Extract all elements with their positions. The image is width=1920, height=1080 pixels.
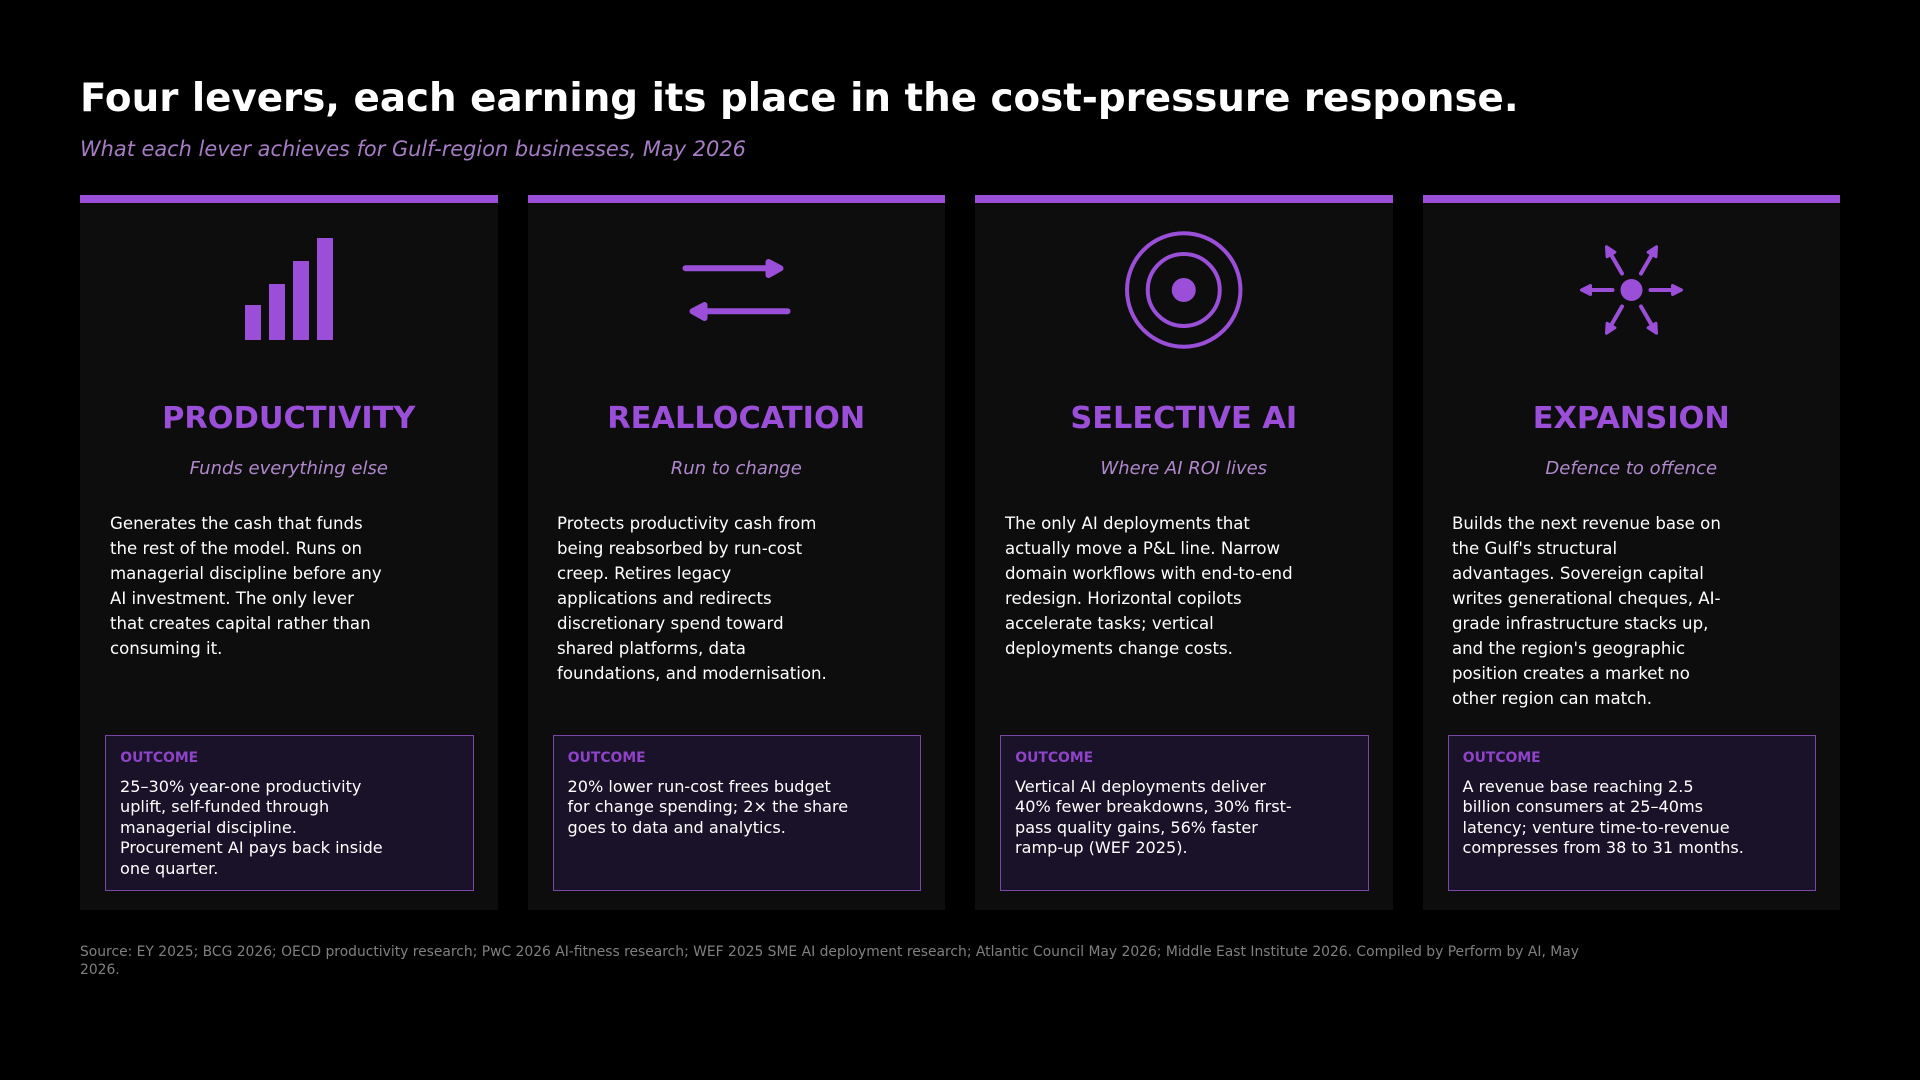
body text: that creates capital rather than xyxy=(110,614,371,632)
outcome box xyxy=(105,735,474,891)
body text: Builds the next revenue base on xyxy=(1452,514,1721,532)
body text xyxy=(110,514,382,658)
outcome box xyxy=(1000,735,1368,891)
heading: reallocation: REALLOCATION xyxy=(607,400,865,436)
title: Four levers, each earning its place in the cost-pressure response. xyxy=(80,76,1519,121)
body text: actually move a P&L line. Narrow xyxy=(1005,538,1280,558)
body text: The only AI deployments that xyxy=(1005,514,1250,532)
outcome box: OUTCOME xyxy=(1015,750,1093,766)
outcome box: A revenue base reaching 2.5 xyxy=(1462,777,1694,796)
outcome box: 20% lower run-cost frees budget xyxy=(568,777,831,796)
body text: creep. Retires legacy xyxy=(557,564,731,582)
outcome box: one quarter. xyxy=(120,859,218,878)
outcome box: billion consumers at 25–40ms xyxy=(1462,797,1703,816)
outcome box xyxy=(1448,735,1816,891)
outcome box: for change spending; 2× the share xyxy=(568,797,848,816)
outcome box: OUTCOME xyxy=(120,750,198,766)
body text: foundations, and modernisation. xyxy=(557,664,827,682)
body text: domain workflows with end-to-end xyxy=(1005,564,1293,582)
outcome box: 40% fewer breakdowns, 30% first- xyxy=(1015,797,1292,816)
body text: managerial discipline before any xyxy=(110,564,382,582)
body text: redesign. Horizontal copilots xyxy=(1005,588,1242,608)
panel: expansion xyxy=(1422,195,1840,910)
panel: selective AI xyxy=(975,195,1392,910)
body text: being reabsorbed by run-cost xyxy=(557,538,802,558)
outcome box: latency; venture time-to-revenue xyxy=(1462,818,1730,837)
body text: applications and redirects xyxy=(557,588,772,608)
outcome box: Procurement AI pays back inside xyxy=(120,838,383,857)
panel: reallocation xyxy=(528,195,945,910)
body text: Protects productivity cash from xyxy=(557,514,816,532)
source footnote: Source: EY 2025; BCG 2026; OECD productivity research; PwC 2026 AI-fitness research; WEF 2025 SME AI deployment research; Atlantic Council May 2026; Middle East Institute 2026. Compiled by Perform by AI, May xyxy=(80,944,1579,960)
body text: the rest of the model. Runs on xyxy=(110,538,362,558)
source footnote xyxy=(80,944,1579,978)
icon: rising bars xyxy=(245,238,333,340)
subtitle: What each lever achieves for Gulf-region businesses, May 2026 xyxy=(80,137,746,161)
body text: AI investment. The only lever xyxy=(110,588,354,608)
body text: accelerate tasks; vertical xyxy=(1005,614,1214,632)
body text: deployments change costs. xyxy=(1005,638,1233,658)
body text: consuming it. xyxy=(110,638,222,658)
outcome box: goes to data and analytics. xyxy=(568,818,786,837)
outcome box: OUTCOME xyxy=(1463,750,1541,766)
outcome box: OUTCOME xyxy=(568,750,646,766)
outcome box: Vertical AI deployments deliver xyxy=(1015,777,1266,796)
tagline: Defence to offence xyxy=(1545,458,1717,479)
tagline: Run to change xyxy=(671,458,802,479)
tagline: Where AI ROI lives xyxy=(1100,458,1267,479)
body text xyxy=(557,514,827,682)
icon: opposing arrows xyxy=(682,259,790,321)
icon: radiating arrows xyxy=(1580,245,1684,335)
tagline: Funds everything else xyxy=(190,458,388,479)
outcome box: compresses from 38 to 31 months. xyxy=(1462,838,1744,857)
body text: shared platforms, data xyxy=(557,638,746,658)
outcome box xyxy=(552,735,921,891)
outcome box: ramp-up (WEF 2025). xyxy=(1015,838,1188,857)
heading: expansion: EXPANSION xyxy=(1533,400,1730,436)
body text xyxy=(1004,514,1293,658)
outcome box: uplift, self-funded through xyxy=(120,797,329,816)
outcome box: managerial discipline. xyxy=(120,818,297,837)
body text: grade infrastructure stacks up, xyxy=(1452,614,1708,632)
body text: advantages. Sovereign capital xyxy=(1452,564,1704,582)
outcome box: 25–30% year-one productivity xyxy=(120,777,361,796)
heading: productivity: PRODUCTIVITY xyxy=(162,400,415,436)
outcome box: pass quality gains, 56% faster xyxy=(1015,818,1258,837)
body text: and the region's geographic xyxy=(1452,638,1685,658)
panel: productivity xyxy=(80,195,498,910)
source footnote: 2026. xyxy=(80,962,120,978)
body text xyxy=(1452,514,1721,708)
heading: selective AI: SELECTIVE AI xyxy=(1070,400,1297,436)
body text: the Gulf's structural xyxy=(1452,538,1617,558)
body text: Generates the cash that funds xyxy=(110,514,363,532)
body text: writes generational cheques, AI- xyxy=(1452,588,1720,608)
body text: position creates a market no xyxy=(1452,664,1690,682)
icon: target xyxy=(1125,231,1242,349)
body text: other region can match. xyxy=(1452,688,1652,708)
body text: discretionary spend toward xyxy=(557,614,784,632)
